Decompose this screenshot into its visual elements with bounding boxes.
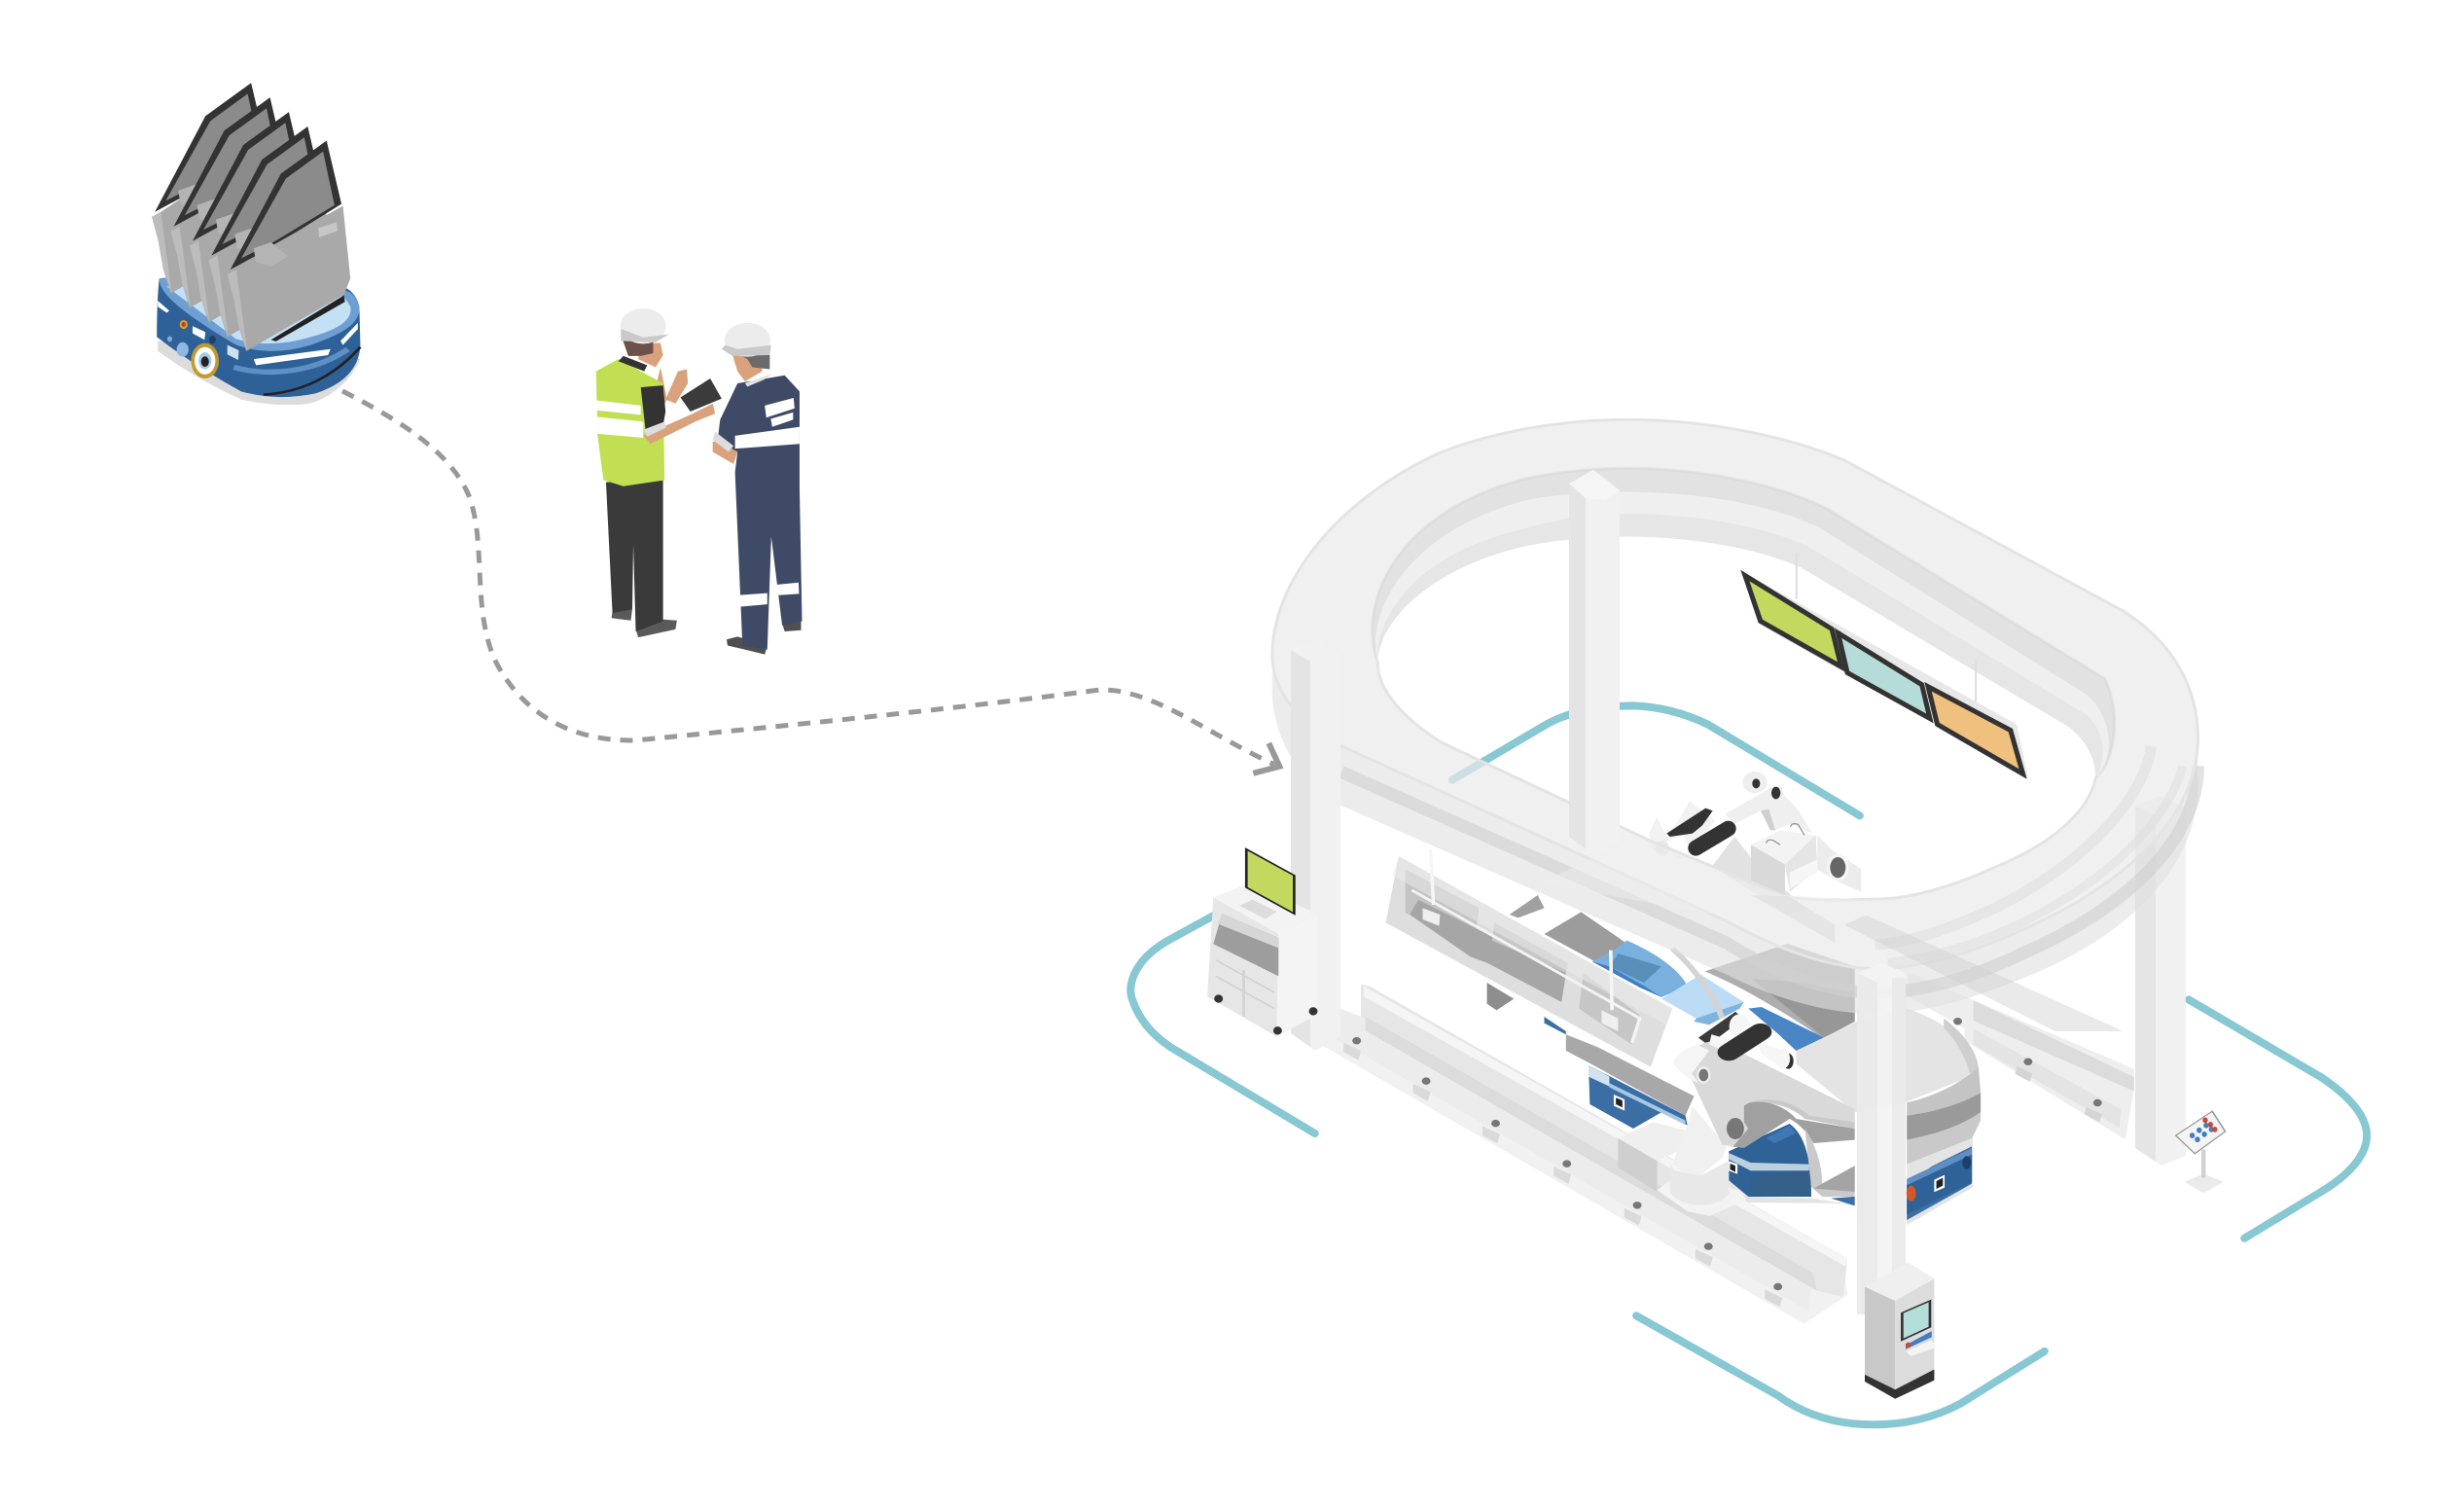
teal floor line: right	[2189, 999, 2367, 1239]
rear welding robot	[1649, 772, 1861, 915]
left pillar	[1291, 639, 1340, 1051]
worker in safety vest	[596, 308, 715, 637]
small button pedestal	[2176, 1111, 2226, 1193]
door fixture frame	[1386, 849, 1694, 1116]
rear floor rail	[1909, 972, 2134, 1139]
front pillar	[1857, 963, 1906, 1314]
workstation kiosk with screen	[1207, 849, 1317, 1037]
car shell	[1510, 895, 1981, 1197]
AGV blue base	[1544, 1017, 1974, 1225]
teal floor line: left	[1130, 916, 1315, 1133]
teal floor line: bottom	[1636, 1315, 2045, 1424]
overhead oval conveyor	[1272, 419, 2197, 1031]
AGV carrying car doors	[152, 83, 360, 405]
front robot arm	[1618, 1012, 1855, 1216]
tablet	[680, 378, 722, 412]
car body on AGV	[1510, 895, 1981, 1225]
front floor rail	[1317, 985, 1847, 1324]
right pillar	[2135, 796, 2186, 1166]
worker in navy overalls	[713, 323, 802, 655]
control cabinet	[1865, 1263, 1937, 1399]
hanging status board	[1742, 554, 2028, 777]
workers with tablet	[596, 308, 802, 655]
teal floor line: top	[1452, 705, 1860, 815]
rear pillar	[1569, 470, 1620, 856]
dashed route	[342, 391, 1279, 773]
support pillars	[1291, 470, 1906, 1314]
